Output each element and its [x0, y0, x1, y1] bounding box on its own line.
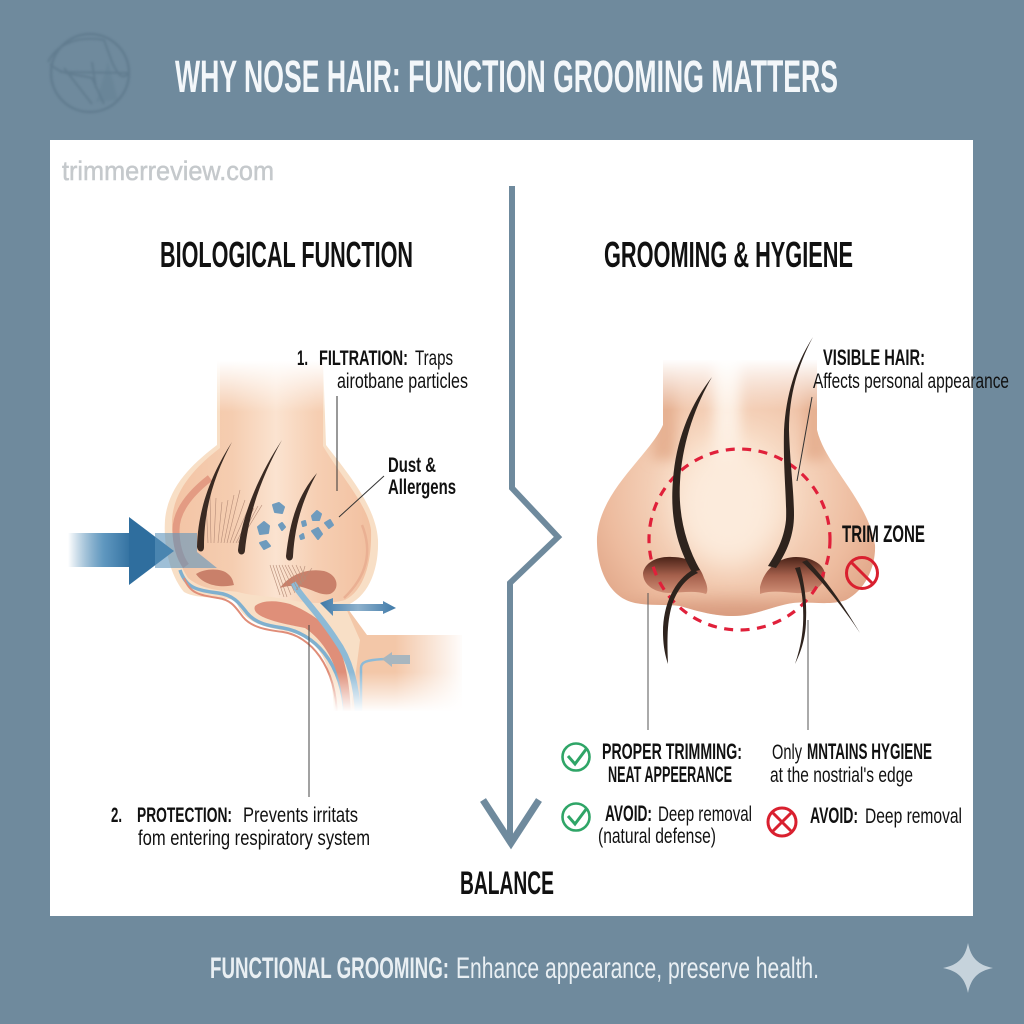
label: avoid natural defense: [598, 801, 752, 848]
panel: main white card: [50, 140, 973, 916]
nose skin: [597, 360, 875, 616]
nose skin: [172, 360, 371, 603]
label: trim zone: TRIM ZONE: [842, 521, 925, 548]
coarse hairs: [197, 440, 317, 560]
icon: prohibited sign: [846, 558, 878, 588]
label: proper trimming: PROPER TRIMMING:: [602, 739, 742, 764]
label: visible hair: VISIBLE HAIR:: [823, 345, 925, 370]
nostril left: [196, 570, 234, 586]
label: filtration: airotbane particles: [337, 370, 468, 393]
fine hairs: [206, 490, 312, 597]
dust clumps: [258, 503, 333, 549]
label: balance: BALANCE: [460, 865, 554, 901]
label: dust and allergens: Dust &: [388, 454, 436, 477]
label: avoid natural defense: Deep removal: [658, 803, 752, 826]
footer tagline: [210, 952, 819, 985]
icon: green check 2: [562, 804, 590, 830]
neck fade bottom: [325, 672, 467, 712]
divider arrow: [483, 186, 558, 843]
bridge shading: [648, 365, 830, 465]
label: dust and allergens: [388, 454, 456, 499]
left passage: [180, 570, 345, 717]
label: maintains hygiene: Only: [772, 741, 802, 764]
leader: filtration: [336, 396, 338, 491]
nostril right: [280, 570, 337, 594]
label: filtration: 1.: [297, 347, 308, 370]
label: protection: [111, 804, 370, 850]
leader: hygiene: [807, 620, 809, 730]
label: maintains hygiene: at the nostrial's edge: [770, 764, 913, 787]
right nostril: [760, 557, 825, 594]
tip highlight: [678, 445, 778, 565]
left nostril: [643, 557, 707, 594]
neck bottom cover: [325, 711, 467, 725]
airflow arrow: incoming: [68, 517, 217, 585]
label: dust and allergens: Allergens: [388, 476, 456, 499]
leader: visible hair: [797, 397, 812, 481]
label: avoid deep removal: [810, 803, 962, 828]
watermark: trimmerreview.com: [62, 156, 274, 186]
nose outer rim: [165, 360, 378, 718]
label: protection: Prevents irritats: [243, 804, 358, 827]
airflow arrow: outgoing: [320, 598, 396, 616]
label: proper trimming: NEAT APPEERANCE: [608, 762, 732, 787]
heading: grooming and hygiene: GROOMING & HYGIENE: [604, 234, 853, 275]
icon: faint nose globe logo: [48, 34, 130, 112]
icon: green check 1: [562, 744, 590, 770]
right inner rim: [344, 525, 367, 598]
label: avoid deep removal: AVOID:: [810, 803, 858, 828]
label: maintains hygiene: MNTAINS HYGIENE: [807, 739, 932, 764]
neck fade right: [395, 625, 465, 720]
illustration: front nose: [597, 337, 875, 664]
label: maintains hygiene: [770, 739, 932, 787]
leader: proper trimming: [647, 593, 649, 730]
footer tagline: Enhance appearance, preserve health.: [456, 952, 819, 985]
top fade: [650, 350, 830, 410]
leader: dust: [339, 476, 384, 517]
top fade: [205, 352, 335, 412]
icon: sparkle star: [943, 943, 993, 993]
icon: red cross: [768, 808, 796, 836]
label: protection: 2.: [111, 804, 122, 827]
label: avoid deep removal: Deep removal: [865, 805, 962, 828]
label: filtration: Traps: [415, 347, 453, 370]
inner wall red band: [176, 478, 210, 566]
central airway: [293, 583, 358, 716]
label: protection: fom entering respiratory system: [138, 827, 370, 850]
trim zone circle: [649, 449, 830, 630]
footer tagline: FUNCTIONAL GROOMING:: [210, 952, 449, 985]
branch airway: [361, 659, 385, 716]
label: filtration: FILTRATION:: [319, 347, 408, 370]
label: protection: PROTECTION:: [137, 804, 232, 827]
label: avoid natural defense: AVOID:: [605, 801, 652, 826]
label: avoid natural defense: (natural defense): [598, 825, 716, 848]
illustration: nose cross-section: [68, 352, 467, 725]
airflow arrow: faint grey: [382, 652, 410, 667]
label: visible hair: [813, 345, 1009, 393]
heading: biological function: BIOLOGICAL FUNCTION: [160, 234, 413, 275]
underside shadow: [637, 594, 832, 616]
leader: protection: [308, 625, 310, 797]
label: filtration: [297, 347, 468, 393]
neck tissue: [340, 598, 462, 712]
label: proper trimming: [602, 739, 742, 787]
lower cavity: [255, 601, 351, 716]
hairs: [663, 337, 860, 664]
